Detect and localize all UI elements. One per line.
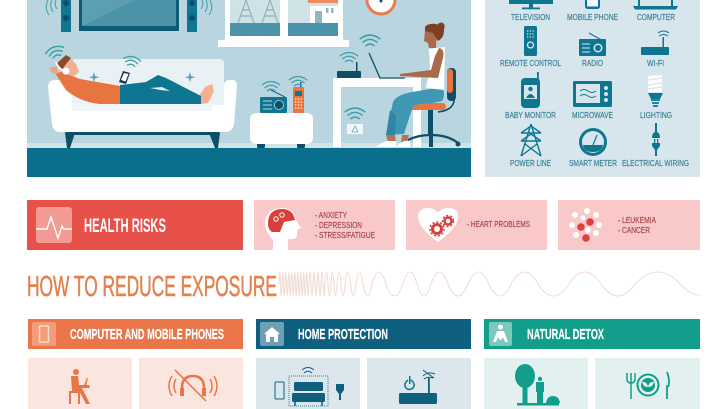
panel: living room scene bbox=[27, 0, 471, 177]
label: smart meter: SMART METER bbox=[569, 159, 617, 168]
label: electrical wiring: ELECTRICAL WIRING bbox=[622, 159, 689, 168]
icon: smart meter bbox=[579, 128, 607, 156]
label: mobile phone: MOBILE PHONE bbox=[567, 13, 618, 22]
sofa bbox=[48, 59, 237, 148]
label: lighting: LIGHTING bbox=[640, 111, 672, 120]
side table with radio and cordless phone bbox=[250, 76, 313, 148]
panel: anxiety, depression, stress: - ANXIETY bbox=[315, 211, 348, 220]
television bbox=[79, 0, 179, 31]
desk with router and wall outlet bbox=[333, 35, 421, 147]
label: radio: RADIO bbox=[582, 59, 603, 68]
icon: computer bbox=[633, 0, 678, 10]
panel: heart problems: - HEART PROBLEMS bbox=[467, 220, 530, 229]
icon: no headphones bbox=[169, 370, 217, 401]
panel: home protection bbox=[256, 319, 471, 409]
icon: radio bbox=[579, 33, 606, 56]
icon: healthy food on plate bbox=[627, 372, 669, 399]
panel: computer and mobile phones: COMPUTER AND MOBILE PHONES bbox=[70, 326, 224, 343]
panel: computer and mobile phones bbox=[28, 319, 243, 409]
label: computer: COMPUTER bbox=[637, 13, 675, 22]
panel: natural detox bbox=[484, 319, 700, 409]
icon: bedroom with devices away from bed bbox=[275, 368, 344, 406]
panel: heart problems bbox=[406, 200, 547, 250]
icon: electrical wiring bbox=[652, 123, 660, 156]
panel: leukemia and cancer: - CANCER bbox=[618, 226, 650, 235]
icon: person using laptop at safe distance bbox=[69, 369, 90, 404]
man lying on sofa with headphones and phone bbox=[44, 44, 214, 104]
label: television: TELEVISION bbox=[511, 13, 550, 22]
panel: anxiety, depression, stress bbox=[254, 200, 395, 250]
icon: television bbox=[509, 0, 553, 9]
panel: leukemia and cancer bbox=[558, 200, 700, 250]
label: microwave: MICROWAVE bbox=[572, 111, 613, 120]
icon: wi-fi router bbox=[641, 31, 669, 55]
panel: leukemia and cancer: - LEUKEMIA bbox=[618, 216, 657, 225]
panel: natural detox: NATURAL DETOX bbox=[527, 326, 604, 343]
icon: microwave bbox=[573, 81, 612, 107]
icon: baby monitor bbox=[521, 72, 540, 108]
icon: mobile phone bbox=[585, 0, 600, 9]
icon: turn off wi-fi router bbox=[399, 370, 437, 404]
panel: sources of EMF icons bbox=[485, 0, 700, 177]
panel: anxiety, depression, stress: - STRESS/FATIGUE bbox=[315, 231, 375, 240]
label: power line: POWER LINE bbox=[510, 159, 551, 168]
panel: health risks banner: HEALTH RISKS bbox=[84, 216, 166, 237]
icon: power line bbox=[521, 124, 541, 156]
label: baby monitor: BABY MONITOR bbox=[505, 111, 556, 120]
icon: lighting bbox=[648, 75, 663, 106]
speakers bbox=[46, 0, 212, 32]
panel: home protection: HOME PROTECTION bbox=[298, 326, 388, 343]
panel: anxiety, depression, stress: - DEPRESSION bbox=[315, 221, 362, 230]
wall shelf with pictures bbox=[218, 0, 349, 47]
title: HOW TO REDUCE EXPOSURE bbox=[27, 271, 277, 303]
icon: person walking near tree bbox=[515, 364, 560, 406]
sine wave decoration bbox=[279, 272, 700, 296]
label: wi-fi: WI-FI bbox=[647, 59, 664, 68]
icon: remote control bbox=[524, 26, 537, 56]
wall clock bbox=[366, 0, 396, 16]
panel: health risks banner bbox=[27, 200, 243, 250]
woman working on laptop in office chair bbox=[376, 22, 460, 147]
label: remote control: REMOTE CONTROL bbox=[500, 59, 561, 68]
